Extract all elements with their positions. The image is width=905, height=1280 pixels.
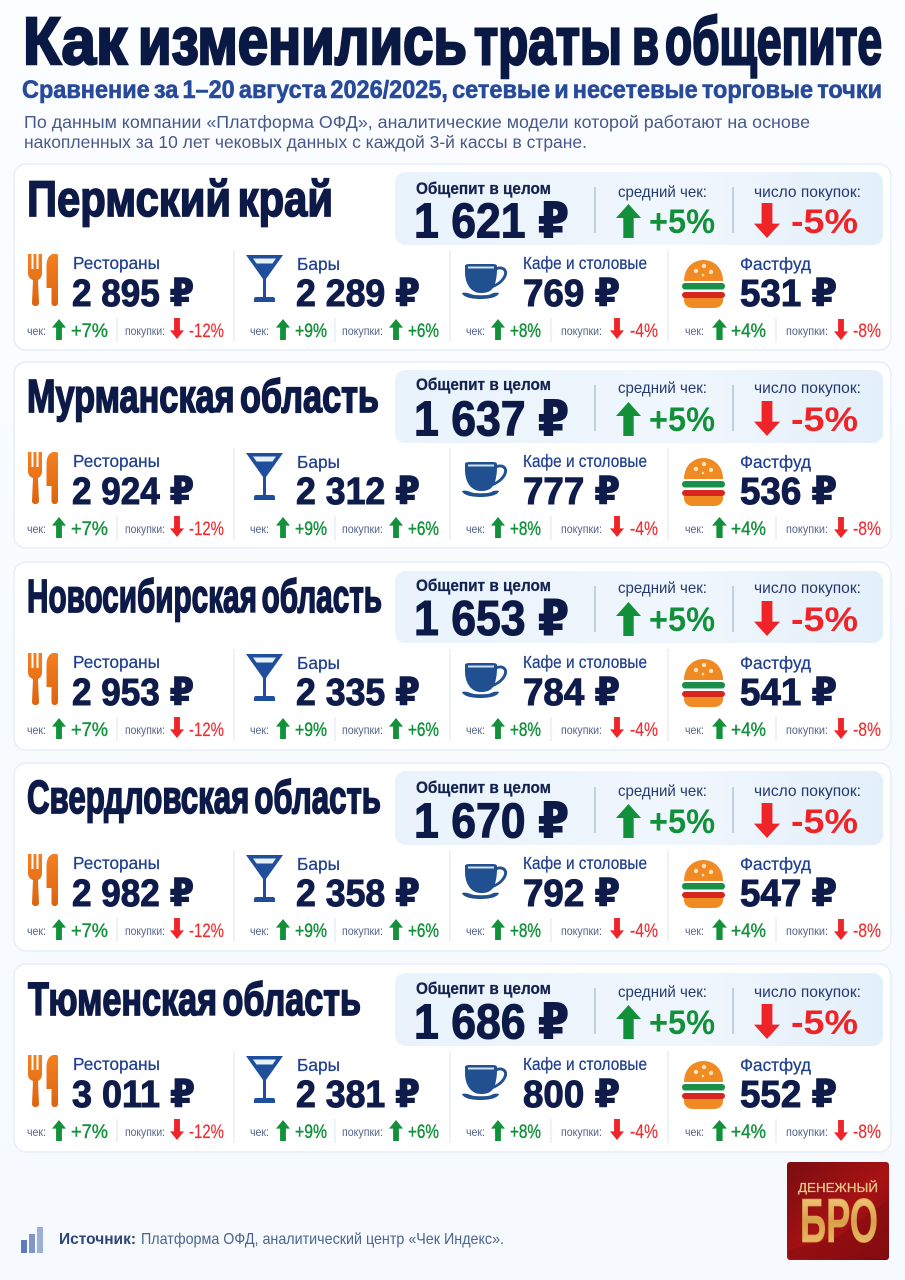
category: cafes: покупки:: [561, 924, 602, 938]
category: bars: +6%: [408, 1122, 439, 1143]
summary panel: -5%: [791, 803, 858, 841]
category: restaurants: +7%: [71, 321, 108, 342]
region heading: Новосибирская область: [27, 570, 382, 622]
category: bars: Бары: [297, 653, 340, 673]
region heading: Тюменская область: [28, 973, 361, 1025]
category: restaurants: 2 953 ₽: [72, 672, 194, 714]
category: restaurants: Рестораны: [73, 451, 160, 471]
category: fast food: чек:: [685, 1125, 704, 1139]
category: restaurants: покупки:: [125, 522, 165, 536]
category: cafes: покупки:: [561, 522, 602, 536]
icon: source bar chart: [21, 1227, 43, 1253]
category: cafes: [462, 652, 658, 741]
category: fast food: -8%: [853, 1122, 881, 1143]
category: restaurants: +7%: [71, 921, 108, 942]
summary panel: +5%: [649, 203, 715, 241]
summary panel: 1 686 ₽: [414, 996, 569, 1050]
category: bars: покупки:: [342, 324, 383, 338]
category: bars: чек:: [250, 1125, 269, 1139]
category: fast food: -8%: [853, 519, 881, 540]
category: bars: +6%: [408, 321, 439, 342]
category: cafes: покупки:: [561, 1125, 602, 1139]
category: fast food: [682, 653, 881, 741]
summary panel: +5%: [649, 1004, 715, 1042]
title: Как: [23, 4, 127, 79]
category: bars: покупки:: [342, 723, 383, 737]
category: fast food: -8%: [853, 720, 881, 741]
category: restaurants: покупки:: [125, 924, 165, 938]
category: cafes: [462, 451, 658, 540]
category: bars: чек:: [250, 324, 269, 338]
category: cafes: чек:: [466, 324, 485, 338]
category: restaurants: чек:: [27, 924, 46, 938]
category: bars: Бары: [297, 854, 340, 874]
category: restaurants: 2 982 ₽: [72, 873, 194, 915]
category: bars: +6%: [408, 921, 439, 942]
summary panel: -5%: [791, 601, 858, 639]
category: cafes: 777 ₽: [523, 471, 620, 513]
category: restaurants: +7%: [71, 519, 108, 540]
category: cafes: +8%: [510, 1122, 541, 1143]
category: bars: Бары: [297, 1055, 340, 1075]
category: cafes: Кафе и столовые: [523, 853, 647, 873]
category: bars: +9%: [295, 720, 327, 741]
category: bars: чек:: [250, 522, 269, 536]
category: bars: чек:: [250, 924, 269, 938]
category: fast food: чек:: [685, 924, 704, 938]
category: cafes: -4%: [630, 720, 658, 741]
category: bars: [246, 254, 439, 342]
category: restaurants: [27, 1054, 224, 1143]
category: restaurants: покупки:: [125, 723, 165, 737]
category: cafes: 792 ₽: [523, 873, 620, 915]
category: fast food: -8%: [853, 921, 881, 942]
category: fast food: +4%: [731, 321, 766, 342]
title: [23, 4, 882, 79]
category: bars: +9%: [295, 519, 327, 540]
category: restaurants: чек:: [27, 723, 46, 737]
category: cafes: покупки:: [561, 324, 602, 338]
category: bars: 2 358 ₽: [296, 873, 420, 915]
category: fast food: [682, 854, 881, 942]
category: fast food: 536 ₽: [740, 471, 837, 513]
summary panel: +5%: [649, 401, 715, 439]
description: По данным компании «Платформа ОФД», аналитические модели которой работают на основе: [24, 112, 810, 132]
category: fast food: 541 ₽: [740, 672, 837, 714]
category: cafes: +8%: [510, 519, 541, 540]
category: cafes: +8%: [510, 321, 541, 342]
category: fast food: Фастфуд: [740, 653, 811, 673]
category: bars: +6%: [408, 519, 439, 540]
summary panel: средний чек:: [618, 984, 707, 1001]
category: bars: покупки:: [342, 1125, 383, 1139]
category: restaurants: 2 895 ₽: [72, 273, 194, 315]
summary panel: Общепит в целом: [416, 180, 551, 198]
category: bars: 2 381 ₽: [296, 1074, 420, 1116]
category: restaurants: [27, 853, 224, 942]
category: restaurants: покупки:: [125, 324, 165, 338]
logo: Денежный Бро: ДЕНЕЖНЫЙ: [798, 1180, 878, 1195]
category: cafes: -4%: [630, 1122, 658, 1143]
source note: Источник:: [59, 1231, 136, 1248]
summary panel: средний чек:: [618, 184, 707, 201]
category: cafes: -4%: [630, 519, 658, 540]
summary panel: число покупок:: [754, 984, 861, 1001]
summary panel: 1 653 ₽: [414, 592, 569, 646]
category: cafes: 784 ₽: [523, 672, 620, 714]
panel: Свердловская область: [14, 763, 891, 951]
category: bars: Бары: [297, 452, 340, 472]
summary panel: средний чек:: [618, 783, 707, 800]
summary panel: +5%: [649, 601, 715, 639]
summary panel: Общепит в целом: [416, 779, 551, 797]
category: cafes: покупки:: [561, 723, 602, 737]
category: restaurants: чек:: [27, 324, 46, 338]
category: restaurants: 3 011 ₽: [72, 1074, 195, 1116]
category: restaurants: чек:: [27, 522, 46, 536]
category: bars: +9%: [295, 921, 327, 942]
summary panel: -5%: [791, 1004, 858, 1042]
category: restaurants: -12%: [189, 519, 224, 540]
category: fast food: 552 ₽: [740, 1074, 837, 1116]
category: restaurants: +7%: [71, 720, 108, 741]
panel: Мурманская область: [14, 362, 891, 548]
category: cafes: [462, 853, 658, 942]
category: cafes: [462, 253, 658, 342]
category: fast food: чек:: [685, 522, 704, 536]
category: fast food: -8%: [853, 321, 881, 342]
category: bars: покупки:: [342, 522, 383, 536]
category: cafes: [462, 1054, 658, 1143]
summary panel: 1 637 ₽: [414, 392, 569, 446]
summary panel: [395, 973, 883, 1050]
category: fast food: +4%: [731, 921, 766, 942]
category: restaurants: -12%: [189, 720, 224, 741]
panel: Тюменская область: [14, 964, 891, 1152]
category: bars: [246, 452, 439, 540]
summary panel: [395, 771, 883, 848]
category: cafes: +8%: [510, 921, 541, 942]
category: restaurants: чек:: [27, 1125, 46, 1139]
category: restaurants: Рестораны: [73, 253, 160, 273]
category: fast food: покупки:: [786, 1125, 828, 1139]
category: fast food: +4%: [731, 519, 766, 540]
category: restaurants: покупки:: [125, 1125, 165, 1139]
category: fast food: [682, 452, 881, 540]
category: restaurants: -12%: [189, 1122, 224, 1143]
category: bars: 2 289 ₽: [296, 273, 420, 315]
title: в: [632, 4, 659, 79]
category: restaurants: [27, 253, 224, 342]
category: restaurants: +7%: [71, 1122, 108, 1143]
category: restaurants: [27, 652, 224, 741]
region heading: Свердловская область: [27, 771, 381, 823]
region heading: Мурманская область: [27, 370, 379, 422]
category: cafes: 800 ₽: [523, 1074, 620, 1116]
summary panel: -5%: [791, 401, 858, 439]
category: fast food: [682, 1055, 881, 1143]
summary panel: [395, 571, 883, 646]
category: fast food: Фастфуд: [740, 1055, 811, 1075]
category: bars: [246, 854, 439, 942]
summary panel: [395, 172, 883, 248]
category: bars: Бары: [297, 254, 340, 274]
category: fast food: [682, 254, 881, 342]
summary panel: средний чек:: [618, 580, 707, 597]
category: fast food: покупки:: [786, 522, 828, 536]
category: fast food: Фастфуд: [740, 854, 811, 874]
category: cafes: Кафе и столовые: [523, 652, 647, 672]
category: fast food: +4%: [731, 1122, 766, 1143]
category: fast food: покупки:: [786, 723, 828, 737]
category: fast food: покупки:: [786, 924, 828, 938]
region heading: Пермский край: [27, 171, 333, 227]
category: bars: +9%: [295, 321, 327, 342]
category: cafes: -4%: [630, 321, 658, 342]
panel: Пермский край: [14, 164, 891, 350]
summary panel: Общепит в целом: [416, 577, 551, 595]
category: fast food: чек:: [685, 723, 704, 737]
category: fast food: 531 ₽: [740, 273, 837, 315]
category: restaurants: -12%: [189, 321, 224, 342]
summary panel: +5%: [649, 803, 715, 841]
category: restaurants: Рестораны: [73, 853, 160, 873]
category: fast food: покупки:: [786, 324, 828, 338]
category: bars: +9%: [295, 1122, 327, 1143]
summary panel: число покупок:: [754, 783, 861, 800]
category: cafes: Кафе и столовые: [523, 253, 647, 273]
category: bars: 2 312 ₽: [296, 471, 420, 513]
category: fast food: чек:: [685, 324, 704, 338]
summary panel: средний чек:: [618, 380, 707, 397]
category: fast food: Фастфуд: [740, 452, 811, 472]
category: bars: покупки:: [342, 924, 383, 938]
category: cafes: чек:: [466, 924, 485, 938]
category: restaurants: [27, 451, 224, 540]
category: cafes: чек:: [466, 1125, 485, 1139]
panel: Новосибирская область: [14, 562, 891, 750]
summary panel: Общепит в целом: [416, 980, 551, 998]
category: bars: чек:: [250, 723, 269, 737]
category: cafes: +8%: [510, 720, 541, 741]
category: cafes: Кафе и столовые: [523, 1054, 647, 1074]
category: cafes: чек:: [466, 723, 485, 737]
description: накопленных за 10 лет чековых данных с каждой 3-й кассы в стране.: [24, 132, 587, 152]
category: restaurants: Рестораны: [73, 652, 160, 672]
category: cafes: 769 ₽: [523, 273, 620, 315]
category: restaurants: 2 924 ₽: [72, 471, 194, 513]
category: bars: 2 335 ₽: [296, 672, 420, 714]
category: restaurants: Рестораны: [73, 1054, 160, 1074]
category: bars: +6%: [408, 720, 439, 741]
summary panel: [395, 370, 883, 446]
source note: Платформа ОФД, аналитический центр «Чек Индекс».: [141, 1231, 504, 1248]
description: [24, 112, 810, 152]
summary panel: 1 621 ₽: [414, 194, 569, 248]
category: bars: [246, 653, 439, 741]
summary panel: Общепит в целом: [416, 376, 551, 394]
category: cafes: Кафе и столовые: [523, 451, 647, 471]
summary panel: 1 670 ₽: [414, 794, 569, 848]
category: fast food: Фастфуд: [740, 254, 811, 274]
title: траты: [474, 4, 622, 79]
category: restaurants: -12%: [189, 921, 224, 942]
summary panel: число покупок:: [754, 380, 861, 397]
category: cafes: чек:: [466, 522, 485, 536]
logo: Денежный Бро: [787, 1162, 889, 1260]
title: изменились: [138, 4, 467, 79]
category: fast food: 547 ₽: [740, 873, 837, 915]
category: fast food: +4%: [731, 720, 766, 741]
summary panel: -5%: [791, 203, 858, 241]
category: cafes: -4%: [630, 921, 658, 942]
summary panel: число покупок:: [754, 580, 861, 597]
category: bars: [246, 1055, 439, 1143]
summary panel: число покупок:: [754, 184, 861, 201]
